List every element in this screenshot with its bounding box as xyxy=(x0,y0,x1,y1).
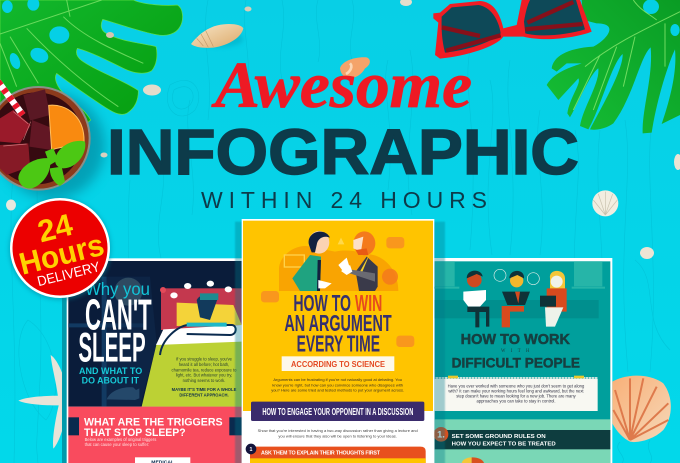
badge: 24 hours delivery: 24 xyxy=(34,207,77,249)
illustration: three seated people xyxy=(463,269,567,327)
text block: intro on bed: heard it all before; hot bath, xyxy=(179,362,229,367)
text block: intro on bed: If you struggle to sleep, you've xyxy=(176,357,233,362)
icon: small pebbles xyxy=(6,0,680,259)
subheading: and what to do about it: AND WHAT TO xyxy=(79,366,142,376)
badge: 24 hours delivery: Hours xyxy=(16,227,108,282)
text block: intro note: approaches you can take to stay in control. xyxy=(476,399,556,404)
section: ground rules xyxy=(434,419,610,463)
text block: intro: know you're right, but how can you convince someone who disagrees with xyxy=(272,382,403,387)
heading: how to win: HOW TO WIN xyxy=(293,290,382,316)
banner: according to science: ACCORDING TO SCIENCE xyxy=(291,359,385,369)
section: ground rules: HOW YOU EXPECT TO BE TREATED xyxy=(452,441,556,447)
bar: how to engage: HOW TO ENGAGE YOUR OPPONENT IN A DISCUSSION xyxy=(262,407,413,418)
title: INFOGRAPHIC: INFOGRAPHIC xyxy=(107,116,579,188)
heading: can't: CAN'T xyxy=(85,291,152,339)
text block: intro: you? Here are some tried and tested methods to put your argument across. xyxy=(271,388,404,393)
step 1 heading: 1 xyxy=(250,447,253,453)
panel: left poster (why you can't sleep) xyxy=(62,258,243,463)
heading: every time: EVERY TIME xyxy=(297,331,380,357)
step 1 heading: ASK THEM TO EXPLAIN THEIR THOUGHTS FIRST xyxy=(261,450,381,456)
text block: discussion: Show that you're interested in having a two-way discussion rather than giving a lecture and xyxy=(258,428,418,433)
badge: 24 hours delivery: DELIVERY xyxy=(35,258,102,289)
section: triggers: that can cause your sleep to suffer: xyxy=(85,442,149,447)
icon: left monstera leaf xyxy=(0,0,183,140)
illustration: two men arguing xyxy=(279,231,398,291)
step 1 heading xyxy=(246,444,426,463)
text block: intro note xyxy=(435,376,598,411)
shadows under leaf and glass xyxy=(0,93,105,199)
icon: right monstera leaf xyxy=(547,0,680,133)
heading: why you: Why you xyxy=(85,279,150,299)
banner: according to science xyxy=(282,356,394,371)
text block: intro on bed: DIFFERENT APPROACH. xyxy=(179,392,229,397)
heading: with: WITH xyxy=(501,349,530,354)
icon: speech bubbles xyxy=(261,237,414,347)
icon: orange slice xyxy=(49,105,84,150)
subheading: and what to do about it xyxy=(79,366,142,385)
text block: intro note: step doesn't have to mean looking for a new job. There are many xyxy=(456,394,577,399)
text block: discussion: you will ensure that they also will be open to listening to your ideas. xyxy=(278,434,397,439)
icon: mint leaves xyxy=(18,141,85,188)
icon: white scallop shell xyxy=(592,190,618,216)
section: triggers: WHAT ARE THE TRIGGERS xyxy=(84,416,223,428)
heading: how to work: HOW TO WORK xyxy=(461,332,570,348)
icon: straw xyxy=(0,82,23,115)
text block: intro on bed: light, etc. But whatever you try, xyxy=(176,373,232,378)
text block: intro on bed: chamomile tea, reduce exposure to xyxy=(172,367,237,372)
panel: right poster (how to work with difficult people) xyxy=(433,258,612,463)
badge: 24 hours delivery xyxy=(9,198,111,300)
icon: sleeping cat xyxy=(107,387,139,400)
icon: orange shell xyxy=(340,57,370,78)
section: ground rules: 1. xyxy=(437,429,445,439)
text block: discussion xyxy=(258,428,418,439)
section: triggers xyxy=(68,407,242,463)
icon: large peach scallop shell xyxy=(612,376,671,442)
title: Awesome: Awesome xyxy=(211,49,472,122)
section: triggers: THAT STOP SLEEP? xyxy=(84,427,186,439)
text block: intro note: Have you ever worked with someone who you just don't seem to get along xyxy=(448,384,585,389)
subheading: and what to do about it: DO ABOUT IT xyxy=(82,375,140,385)
icon: conch shell xyxy=(191,24,243,48)
illustration: bed with sleeper xyxy=(142,281,242,407)
section: ground rules: SET SOME GROUND RULES ON xyxy=(452,434,546,440)
icon: red sunglasses xyxy=(433,0,592,59)
text block: intro xyxy=(271,377,404,393)
text block: intro note: with? It can make your working hours feel long and awkward, but the next xyxy=(448,389,584,394)
bar: how to engage xyxy=(251,402,424,421)
subtitle: within 24 hours: WITHIN 24 HOURS xyxy=(201,187,487,213)
panel: center poster (how to win an argument) xyxy=(235,219,445,463)
panel: left poster (why you can't sleep): SLEEP xyxy=(78,324,146,371)
icon: glass of iced cola with orange and mint xyxy=(0,82,91,191)
icon: starfish xyxy=(18,355,68,449)
heading: an argument: AN ARGUMENT xyxy=(284,310,392,336)
text block: intro on bed: nothing seems to work. xyxy=(183,378,225,383)
heading: difficult people: DIFFICULT PEOPLE xyxy=(452,354,580,370)
section: triggers: Below are examples of original triggers xyxy=(85,437,156,442)
text block: intro on bed: MAYBE IT'S TIME FOR A WHOLE xyxy=(172,387,237,392)
text block: intro: Arguments can be frustrating if you're not naturally good at debating. You xyxy=(273,377,402,382)
text block: intro on bed xyxy=(172,357,237,397)
